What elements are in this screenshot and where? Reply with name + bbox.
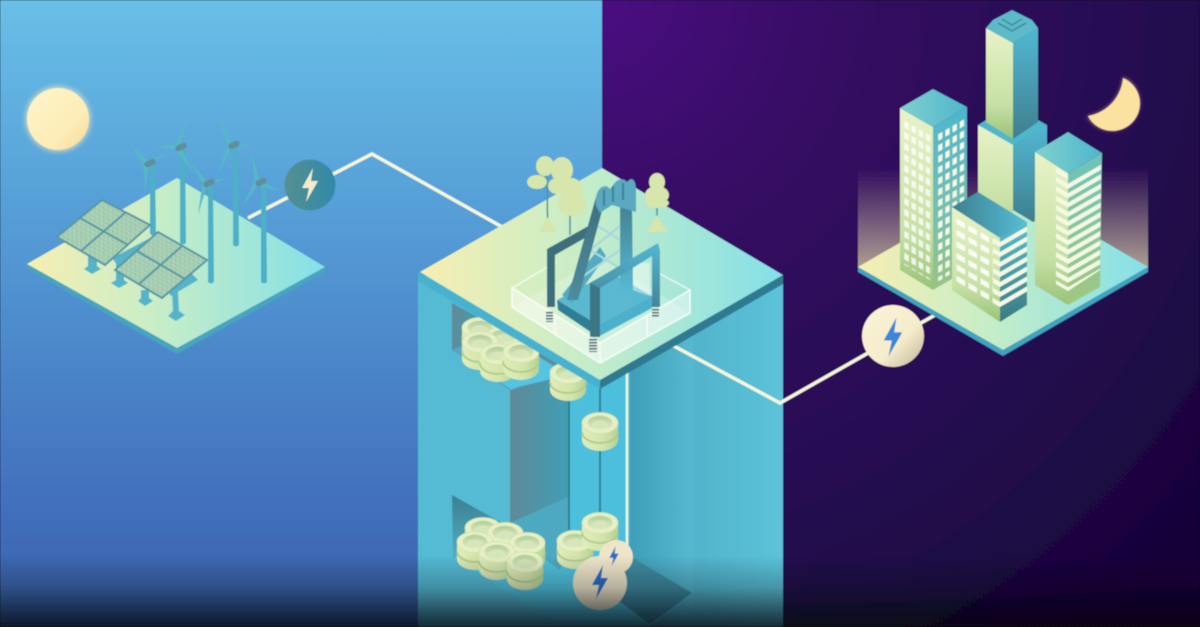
middle weight <box>582 412 618 451</box>
central shaft <box>510 360 627 627</box>
icon: right lightning badge <box>862 305 924 367</box>
wind turbines <box>128 117 282 284</box>
mine headframe <box>512 179 690 363</box>
springs <box>546 308 659 352</box>
front arch <box>590 243 660 337</box>
back arch <box>547 224 592 307</box>
panel: surface platform <box>418 168 783 389</box>
power line: right output <box>672 315 935 403</box>
lower weights <box>457 512 618 590</box>
power line: left input <box>248 154 504 228</box>
upper weights <box>462 318 586 401</box>
building left <box>900 89 967 290</box>
fence <box>512 258 690 363</box>
building center <box>952 192 1027 322</box>
panel: renewable generation platform <box>27 117 325 354</box>
foundation <box>557 272 652 325</box>
icon: sun <box>25 86 91 152</box>
panel: city platform <box>858 10 1148 356</box>
city glow <box>858 165 1148 268</box>
lower storage alcove <box>452 495 692 627</box>
power line down shaft <box>626 372 628 548</box>
hoist ropes <box>569 385 600 530</box>
background: day sky <box>0 0 603 627</box>
tower <box>562 179 650 303</box>
trees <box>527 156 669 235</box>
upper storage alcove <box>452 303 600 523</box>
building right <box>1035 132 1102 305</box>
icon: left lightning badge <box>284 160 336 210</box>
background: night sky <box>602 0 1200 627</box>
icon: stored energy bubbles <box>573 540 633 610</box>
icon: moon <box>1087 77 1140 131</box>
skyscraper <box>978 10 1047 240</box>
bottom fade <box>0 555 1200 627</box>
panel: underground shaft block <box>418 276 935 627</box>
solar panels <box>57 200 207 321</box>
